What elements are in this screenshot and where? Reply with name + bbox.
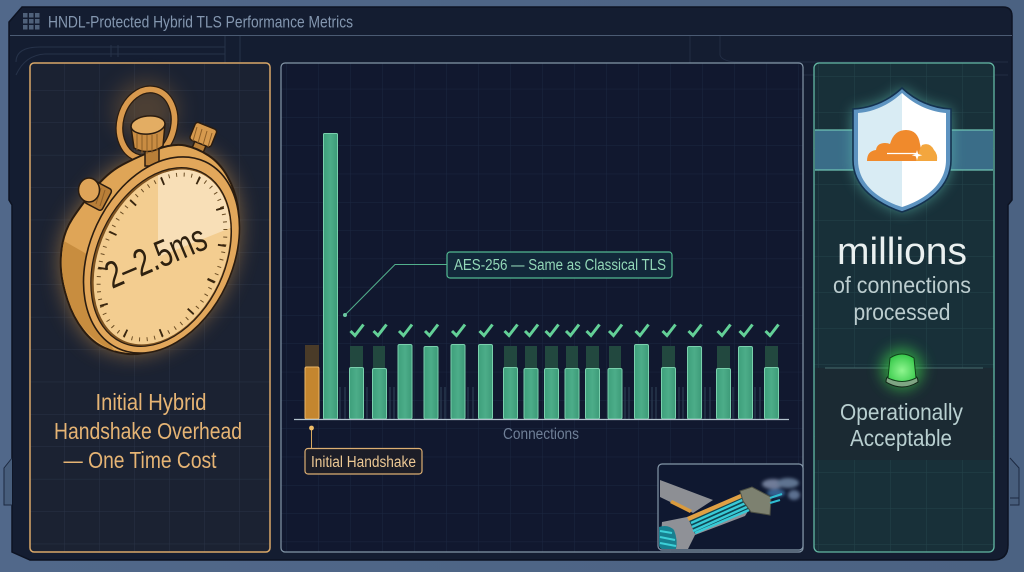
callout: initial handshake: Initial Handshake bbox=[311, 454, 416, 471]
status text bbox=[840, 399, 963, 451]
stopwatch side button bbox=[78, 178, 112, 211]
cloud logo bbox=[867, 130, 937, 161]
ghost bars bbox=[305, 345, 778, 368]
stopwatch body shadow bbox=[62, 241, 115, 351]
callout: AES-256: AES-256 — Same as Classical TLS bbox=[454, 257, 666, 274]
overhead caption: Handshake Overhead bbox=[54, 418, 242, 444]
connections stat bbox=[833, 231, 971, 325]
panel: handshake overhead bbox=[30, 63, 270, 552]
bars: connections bbox=[324, 134, 778, 419]
stopwatch crown bbox=[130, 114, 166, 166]
rear conduit bbox=[660, 480, 713, 513]
overhead caption: Initial Hybrid bbox=[96, 389, 206, 415]
connector bbox=[740, 487, 771, 515]
icon: stopwatch bbox=[53, 80, 270, 379]
tick marks bbox=[340, 387, 760, 419]
stopwatch top button bbox=[189, 122, 217, 158]
callout: initial handshake bbox=[305, 426, 422, 474]
stopwatch face bbox=[94, 170, 230, 344]
inset: cable illustration bbox=[658, 464, 803, 550]
axis label: Connections bbox=[503, 426, 579, 443]
axis bbox=[294, 418, 789, 420]
front conduit bbox=[660, 512, 748, 549]
callout: AES-256 bbox=[343, 252, 672, 317]
stopwatch reading: 2–2.5ms bbox=[99, 217, 213, 297]
status text: Operationally bbox=[840, 399, 963, 425]
overhead caption bbox=[54, 389, 242, 473]
connections stat: millions bbox=[837, 231, 967, 273]
title: HNDL-Protected Hybrid TLS Performance Metrics bbox=[48, 14, 353, 32]
check marks bbox=[350, 324, 778, 336]
panel: scale status bbox=[814, 63, 994, 552]
stopwatch bezel bbox=[53, 131, 270, 379]
panel: connections chart bbox=[281, 63, 803, 552]
status text: Acceptable bbox=[850, 425, 952, 451]
banner band bbox=[815, 130, 993, 170]
smoke bbox=[762, 478, 800, 500]
overhead caption: — One Time Cost bbox=[64, 447, 217, 473]
icon: shield with cloud bbox=[850, 88, 954, 213]
connections stat: processed bbox=[854, 299, 950, 325]
icon: grid menu bbox=[23, 13, 40, 30]
stopwatch body bbox=[61, 145, 239, 354]
icon: green status light bbox=[881, 348, 923, 390]
connections stat: of connections bbox=[833, 272, 971, 298]
bar: initial handshake bbox=[305, 367, 319, 419]
stopwatch ring bbox=[112, 84, 182, 164]
